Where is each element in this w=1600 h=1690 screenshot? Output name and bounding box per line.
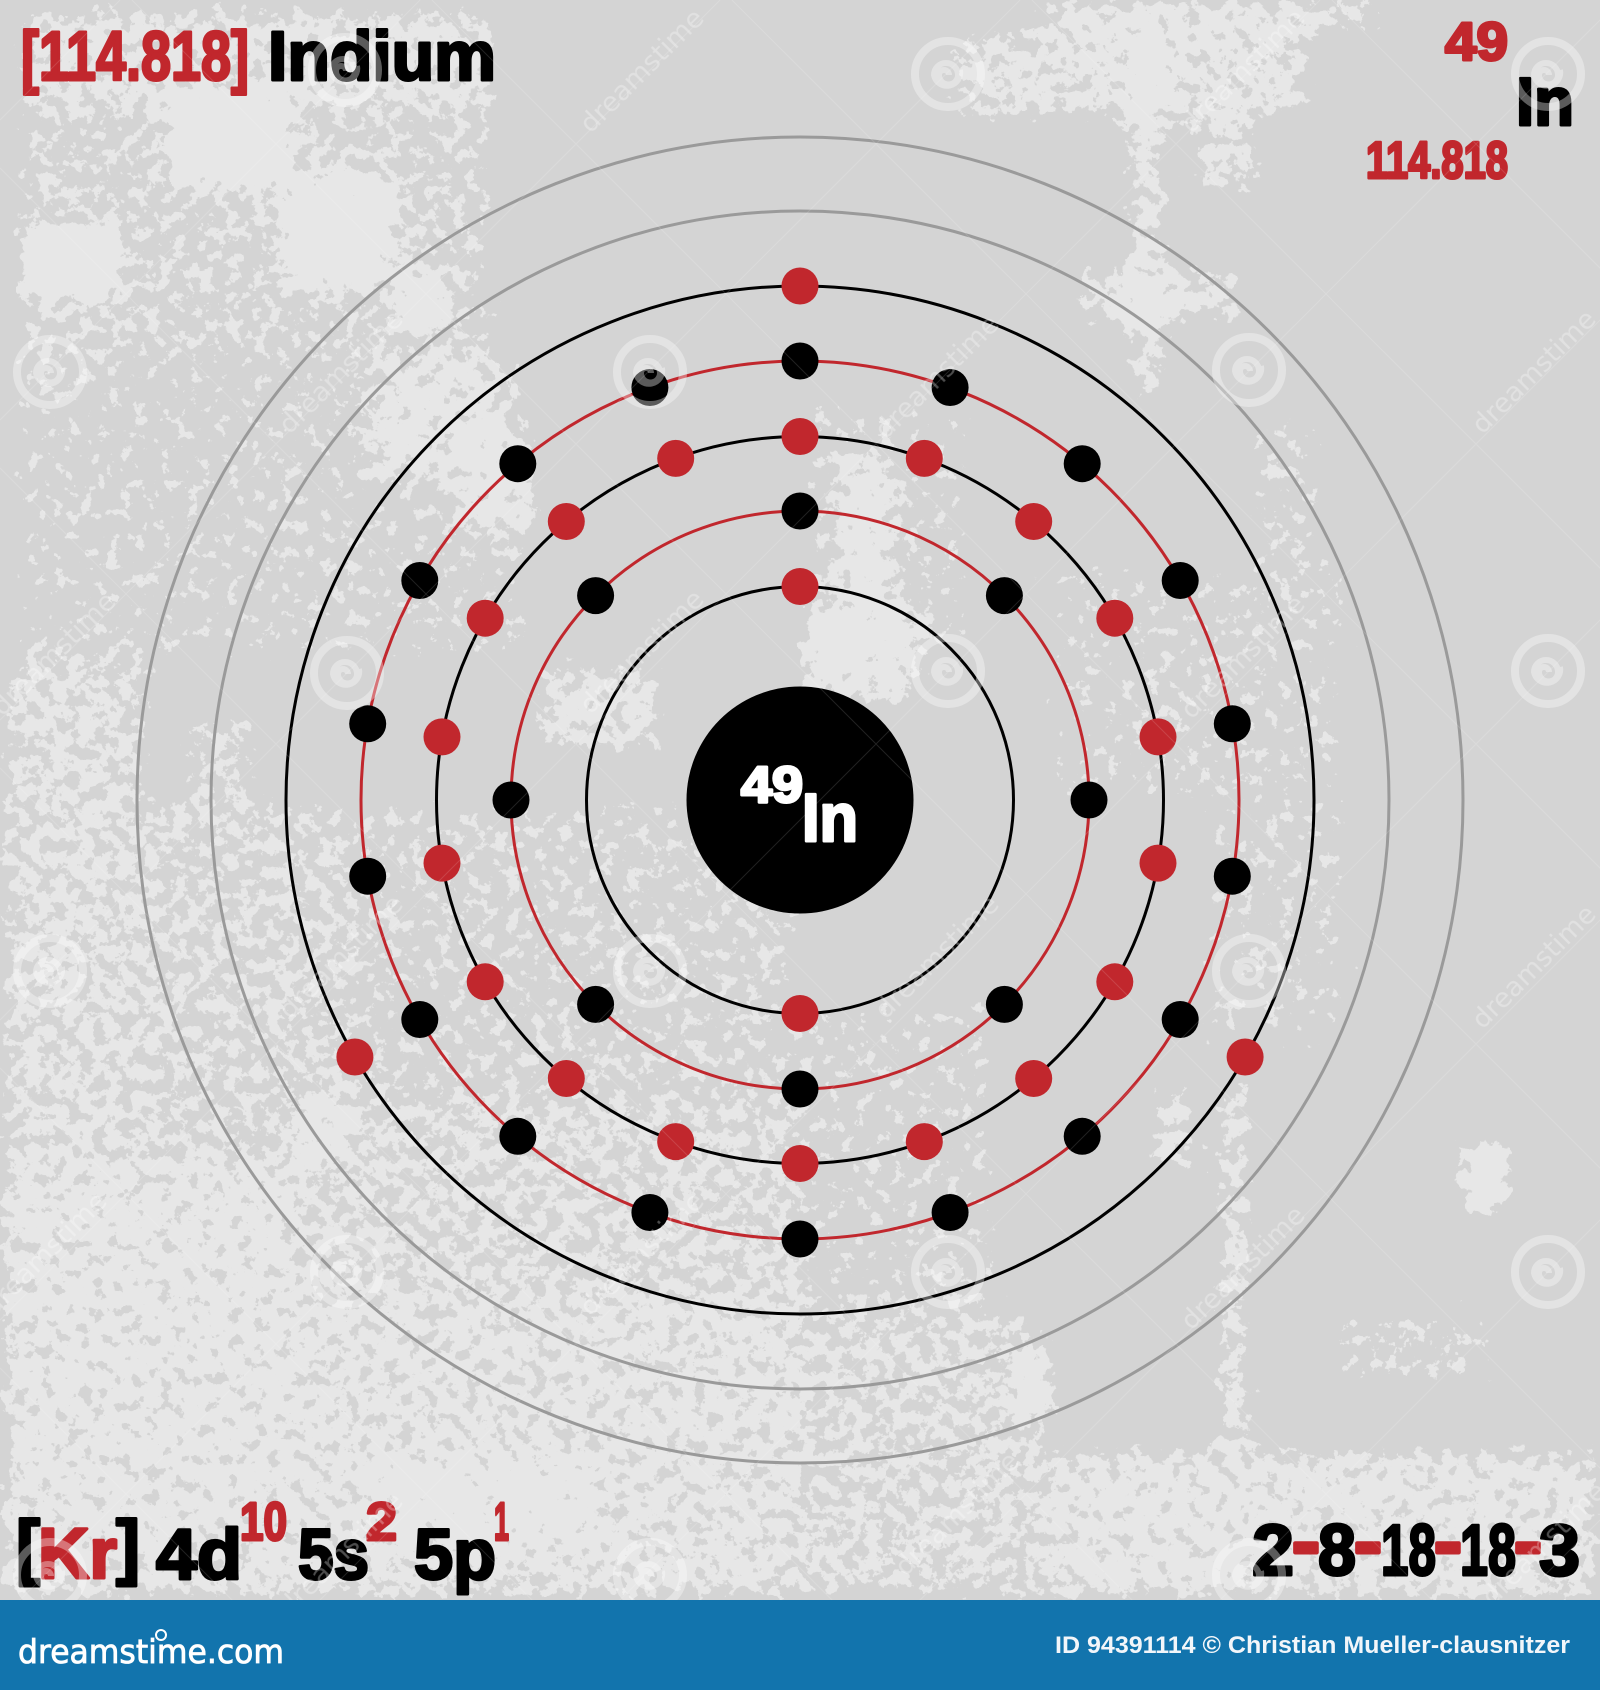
electron configuration: 2 [366, 1492, 397, 1552]
element card: top right: 114.818 [1366, 132, 1508, 190]
element card: top right: In [1516, 64, 1574, 140]
electron configuration: Kr [38, 1515, 117, 1594]
electron shells [137, 137, 1463, 1463]
electrons per shell: 3 [1539, 1511, 1580, 1591]
shell 2 electrons: 8 [492, 492, 1108, 1108]
nucleus label: 49 [741, 756, 803, 813]
element card: top right [1366, 12, 1574, 190]
electrons per shell: 18 [1460, 1511, 1516, 1591]
watermark overlay: dreamstime [1466, 304, 1600, 440]
watermark overlay: dreamstime [1175, 3, 1311, 139]
watermark overlay: dreamstime [869, 309, 1005, 445]
watermark overlay: dreamstime [869, 889, 1005, 1025]
footer logo: dreamstime.com [18, 1632, 284, 1671]
shell 3 electrons: 18 [424, 418, 1176, 1182]
watermark overlay: dreamstime [574, 584, 710, 720]
element card: top right: 49 [1445, 12, 1508, 72]
electron configuration: 10 [240, 1492, 287, 1552]
electrons per shell: - [1514, 1497, 1542, 1585]
watermark overlay: dreamstime [273, 304, 409, 440]
watermark overlay: dreamstime [1466, 899, 1600, 1035]
electron configuration: 5s [298, 1516, 369, 1595]
electrons per shell: - [1354, 1497, 1382, 1585]
watermark overlay: dreamstime [1175, 1200, 1311, 1336]
nucleus label [741, 756, 858, 856]
watermark overlay: dreamstime [574, 3, 710, 139]
electron configuration [16, 1492, 509, 1595]
title: Indium [268, 17, 496, 95]
electron configuration: 5p [414, 1516, 496, 1595]
electron configuration: ] [116, 1507, 140, 1587]
watermark overlay: dreamstime [1175, 589, 1311, 725]
footer bar [0, 1600, 1600, 1690]
shell 4 electrons: 18 [349, 342, 1251, 1258]
text: 1 [494, 1492, 509, 1552]
atom diagram [137, 137, 1463, 1463]
electron configuration: [ [16, 1507, 40, 1587]
watermark overlay: dreamstime [574, 1186, 710, 1322]
title: [114.818] [21, 17, 249, 95]
watermark overlay: dreamstime [273, 889, 409, 1025]
watermark overlay: dreamstime [273, 1486, 409, 1622]
footer credit: ID 94391114 © Christian Mueller-clausnitzer [1055, 1632, 1570, 1659]
electrons per shell: 18 [1381, 1511, 1436, 1591]
electrons per shell [1252, 1497, 1580, 1591]
nucleus [686, 686, 914, 914]
nucleus label: In [802, 780, 858, 856]
electrons per shell: - [1292, 1497, 1320, 1585]
title [21, 17, 496, 95]
shell 1 electrons: 2 [782, 568, 818, 1032]
electrons per shell: 8 [1318, 1511, 1356, 1591]
shell 5 electrons: 3 [336, 268, 1264, 1076]
electron configuration: 4d [156, 1516, 242, 1595]
electrons per shell: - [1434, 1497, 1462, 1585]
electrons per shell: 2 [1252, 1511, 1294, 1591]
watermark overlay: dreamstime [889, 1446, 1025, 1582]
